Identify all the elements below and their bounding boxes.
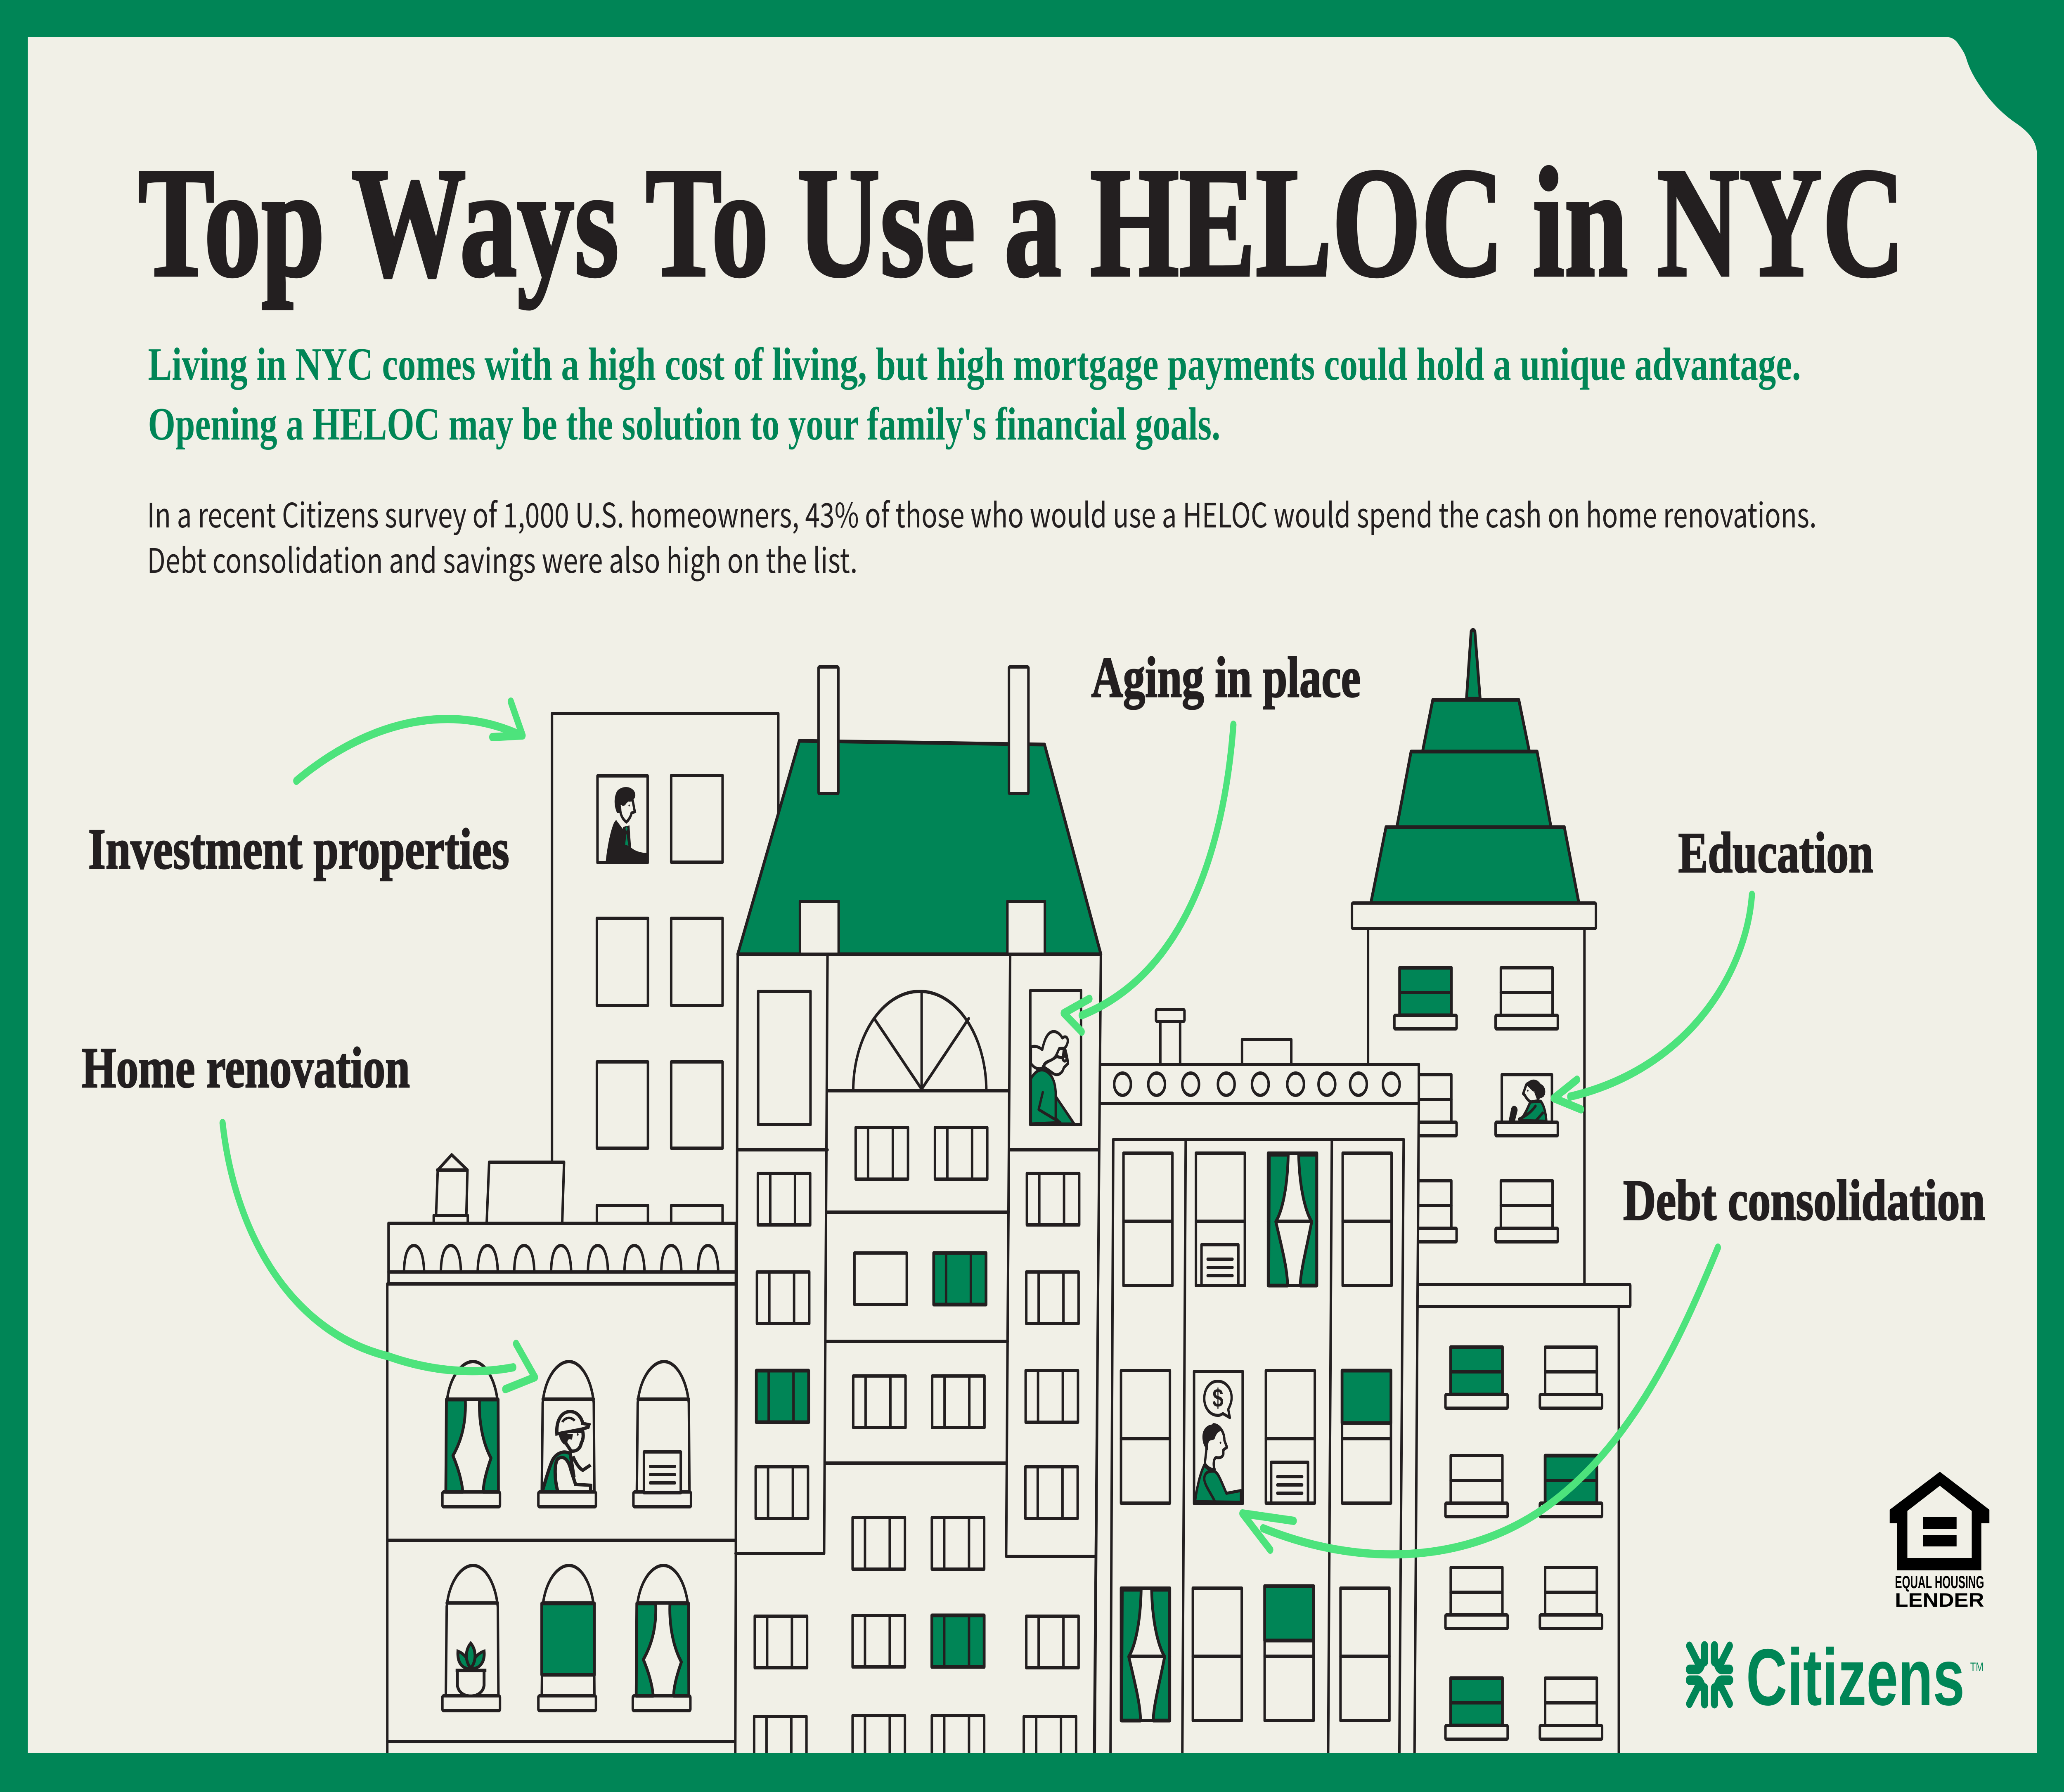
logo: equal housing lender: LENDER: [1895, 1589, 1984, 1611]
arrow: debt consolidation: [1243, 1248, 1718, 1554]
arched window with air conditioner: [633, 1362, 691, 1507]
figure: construction worker: [542, 1411, 591, 1492]
window with blind: [1265, 1586, 1314, 1721]
roof arches: [404, 1246, 718, 1272]
label: debt consolidation: Debt consolidation: [1623, 1168, 1985, 1232]
water tank: [434, 1155, 468, 1223]
logo: citizens: TM: [1970, 1660, 1984, 1674]
label: education: Education: [1678, 821, 1873, 885]
roof tiers: [1371, 700, 1579, 903]
bottom frame bar: [0, 1753, 2064, 1792]
building: right back tower: [1352, 630, 1596, 1300]
window with man and speech bubble: [1194, 1371, 1243, 1504]
arched window with plant: [443, 1565, 500, 1711]
dormers: [800, 901, 1045, 954]
fan window: [853, 991, 986, 1091]
building: tall back-left tower: [552, 714, 778, 1239]
label: investment properties: Investment properties: [88, 817, 509, 881]
figure: man in suit: [606, 787, 647, 863]
green subheading: Opening a HELOC may be the solution to your family's financial goals.: [148, 399, 1220, 450]
cornice portholes: [1114, 1073, 1400, 1095]
arched window with worker: [538, 1362, 596, 1507]
chimney: [1156, 1009, 1184, 1067]
label: aging in place: Aging in place: [1091, 645, 1361, 709]
window with curtains: [1121, 1588, 1170, 1721]
arched window with curtains: [443, 1362, 500, 1507]
building: middle block: [1095, 1009, 1419, 1761]
logo: citizens: Citizens: [1746, 1632, 1965, 1722]
arched window with curtains: [633, 1565, 690, 1711]
survey body text: Debt consolidation and savings were also high on the list.: [147, 534, 857, 583]
arched window with blind: [538, 1565, 596, 1711]
window with curtains: [1268, 1153, 1317, 1286]
label: home renovation: Home renovation: [82, 1036, 410, 1100]
chimneys: [819, 667, 1028, 794]
title: Top Ways To Use a HELOC in NYC: [138, 136, 1905, 310]
logo: equal housing lender: EQUAL HOUSING: [1895, 1573, 1984, 1592]
building: central block: [735, 667, 1101, 1768]
arrow: aging in place: [1064, 725, 1233, 1032]
figure: older woman: [1031, 1031, 1074, 1124]
window with woman at laptop: [1496, 1075, 1558, 1136]
survey body text: [147, 488, 1817, 583]
survey body text: In a recent Citizens survey of 1,000 U.S. homeowners, 43% of those who would use a HELOC would spend the cash on home renovations.: [147, 488, 1817, 537]
green subheading: Living in NYC comes with a high cost of living, but high mortgage payments could hold a unique advantage.: [148, 339, 1801, 390]
logo: equal housing lender: [1890, 1472, 1989, 1611]
figure: woman at laptop: [1510, 1080, 1546, 1121]
speech bubble with dollar sign: [1204, 1381, 1232, 1418]
green subheading: [148, 339, 1801, 450]
building: left block: [387, 1155, 736, 1763]
arrow: home renovation: [222, 1123, 535, 1389]
building: right front block: [1393, 1284, 1630, 1761]
window with blind: [1342, 1371, 1391, 1503]
arrow: investment properties: [296, 702, 523, 781]
icon: citizens mark: [1690, 1646, 1730, 1704]
mansard roof: [738, 741, 1101, 954]
spire: [1467, 630, 1480, 699]
speech bubble with dollar sign: $: [1212, 1383, 1224, 1413]
figure: man thinking about money: [1195, 1424, 1241, 1502]
arrow: education: [1554, 895, 1752, 1109]
